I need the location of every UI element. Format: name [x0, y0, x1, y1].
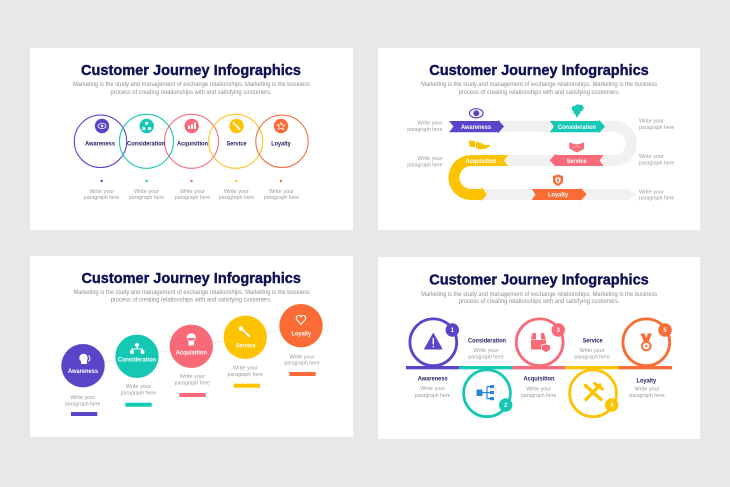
title: Customer Journey Infographics: [429, 272, 649, 288]
arrow: acquisition: [449, 155, 508, 202]
marker dots: [100, 180, 282, 182]
paragraph captions: paragraph here: [415, 393, 450, 399]
paragraph captions: Write your: [269, 189, 294, 195]
subtitle: [73, 82, 310, 96]
grey track: [484, 126, 631, 194]
step: service: Service: [236, 342, 256, 349]
icon: network: [140, 119, 154, 133]
step labels: Service: [226, 140, 247, 147]
panel: winding arrows: [378, 48, 700, 230]
subtitle: process of creating relationships with and satisfying customers.: [459, 299, 620, 305]
paragraph captions: paragraph here: [84, 195, 119, 201]
paragraph captions: [65, 354, 320, 407]
subtitle: process of creating relationships with and satisfying customers.: [111, 298, 272, 304]
number badges: 3: [557, 328, 561, 334]
step labels: Loyalty: [637, 377, 656, 384]
paragraph captions: Write your: [418, 121, 443, 127]
panel: rising circles: [30, 256, 353, 437]
paragraph captions: paragraph here: [407, 127, 442, 133]
arrow: awareness: Awareness: [461, 124, 491, 131]
arrow: acquisition: Acquisition: [466, 158, 497, 165]
arrow: loyalty: Loyalty: [548, 192, 568, 199]
paragraph captions: paragraph here: [468, 354, 504, 360]
paragraph captions: Write your: [420, 386, 445, 392]
paragraph captions: Write your: [639, 119, 664, 125]
rings: [410, 319, 670, 417]
step: loyalty: Loyalty: [292, 330, 311, 337]
accent bars: [71, 372, 316, 416]
paragraph captions: Write your: [126, 384, 151, 390]
step: acquisition: [170, 325, 213, 368]
subtitle: process of creating relationships with and satisfying customers.: [110, 90, 272, 96]
number badges: [446, 323, 672, 412]
icon: heart: [296, 316, 306, 324]
paragraph captions: paragraph here: [629, 393, 665, 399]
icon: head: [79, 354, 90, 364]
subtitle: process of creating relationships with and satisfying customers.: [459, 90, 620, 96]
icon: crossed tools: [586, 384, 602, 400]
subtitle: [421, 82, 657, 96]
icon: handshake: [569, 142, 584, 152]
paragraph captions: Write your: [418, 156, 443, 162]
step: awareness: Awareness: [68, 368, 98, 375]
subtitle: Marketing is the study and management of exchange relationships. Marketing is the business: [73, 290, 310, 296]
icon: shield: [553, 174, 563, 186]
paragraph captions: Write your: [224, 189, 249, 195]
step labels: Loyalty: [271, 140, 291, 147]
number badges: 4: [610, 403, 614, 409]
icon: flow diagram: [476, 385, 494, 400]
step: consideration: [115, 335, 159, 378]
step labels: Acquisition: [177, 140, 208, 147]
paragraph captions: paragraph here: [284, 361, 320, 367]
icon: warning triangle: [425, 334, 442, 349]
paragraph captions: paragraph here: [639, 196, 674, 202]
paragraph captions: [84, 189, 299, 201]
subtitle: [421, 292, 657, 305]
subtitle: Marketing is the study and management of exchange relationships. Marketing is the business: [73, 82, 310, 88]
arrow: consideration: Consideration: [558, 124, 596, 131]
arrow: service: Service: [567, 158, 587, 165]
paragraph captions: paragraph here: [129, 195, 164, 201]
step labels: Awareness: [85, 140, 115, 147]
paragraph captions: Write your: [233, 366, 258, 372]
step labels: [418, 338, 656, 384]
number badges: 2: [504, 403, 508, 409]
paragraph captions: paragraph here: [228, 372, 263, 378]
step: loyalty: [279, 304, 323, 347]
icon: brain tree: [572, 104, 584, 118]
paragraph captions: paragraph here: [574, 354, 610, 360]
paragraph captions: paragraph here: [175, 195, 210, 201]
panel: overlapping circles: [30, 48, 353, 230]
icon: medal: [640, 334, 652, 350]
icon: org tree: [130, 343, 144, 354]
step labels: Consideration: [468, 338, 506, 345]
paragraph captions: paragraph here: [521, 393, 556, 399]
paragraph captions: Write your: [639, 154, 664, 160]
paragraph captions: Write your: [639, 189, 664, 195]
title: Customer Journey Infographics: [429, 62, 649, 79]
subtitle: Marketing is the study and management of exchange relationships. Marketing is the business: [421, 82, 657, 88]
paragraph captions: Write your: [580, 348, 605, 354]
icon: hand: [469, 140, 491, 149]
grey track arrowhead: [628, 189, 637, 200]
icon: star: [274, 119, 288, 133]
paragraph captions: Write your: [134, 189, 159, 195]
paragraph captions: paragraph here: [639, 160, 674, 166]
paragraph captions: paragraph here: [121, 390, 156, 396]
icon: eye: [95, 119, 109, 133]
subtitle: [73, 290, 310, 304]
paragraph captions: paragraph here: [407, 162, 442, 168]
paragraph captions: [415, 348, 665, 399]
panel: timeline rings: [378, 257, 700, 439]
step labels: Acquisition: [524, 375, 555, 382]
step: service: [224, 316, 267, 359]
step: acquisition: Acquisition: [176, 350, 207, 357]
icon: chart: [184, 119, 199, 133]
paragraph captions: Write your: [180, 374, 205, 380]
paragraph captions: Write your: [290, 354, 315, 360]
paragraph captions: paragraph here: [639, 125, 674, 131]
step: consideration: Consideration: [118, 356, 156, 363]
paragraph captions: Write your: [89, 189, 114, 195]
arrow: service: [550, 154, 604, 167]
paragraph captions: Write your: [634, 386, 660, 392]
subtitle: Marketing is the study and management of exchange relationships. Marketing is the business: [421, 292, 657, 298]
title: Customer Journey Infographics: [81, 62, 301, 79]
icon: eye: [470, 109, 483, 118]
number badges: 5: [663, 328, 667, 334]
paragraph captions: paragraph here: [65, 401, 100, 407]
step labels: [85, 140, 291, 147]
connector line: [83, 326, 301, 366]
paragraph captions: Write your: [526, 386, 551, 392]
timeline bar: [406, 366, 672, 369]
arrow: awareness: [449, 120, 504, 133]
step labels: Consideration: [127, 140, 165, 147]
step: awareness: [61, 344, 105, 387]
icon: wrench: [229, 119, 244, 133]
number badges: 1: [451, 328, 455, 334]
icon: box with shield: [531, 333, 550, 352]
arrow: loyalty: [532, 188, 587, 201]
icon: parachute box: [186, 333, 196, 346]
paragraph captions: paragraph here: [175, 380, 210, 386]
paragraph captions: [407, 119, 674, 202]
title: Customer Journey Infographics: [81, 270, 301, 287]
icon: wrench: [239, 326, 250, 336]
paragraph captions: paragraph here: [264, 195, 299, 201]
paragraph captions: Write your: [474, 348, 499, 354]
step labels: Service: [583, 338, 603, 345]
step labels: Awareness: [418, 376, 448, 383]
paragraph captions: Write your: [70, 395, 95, 401]
paragraph captions: paragraph here: [219, 195, 254, 201]
arrow: consideration: [550, 120, 605, 133]
paragraph captions: Write your: [180, 189, 205, 195]
overlapping rings: [74, 114, 308, 168]
